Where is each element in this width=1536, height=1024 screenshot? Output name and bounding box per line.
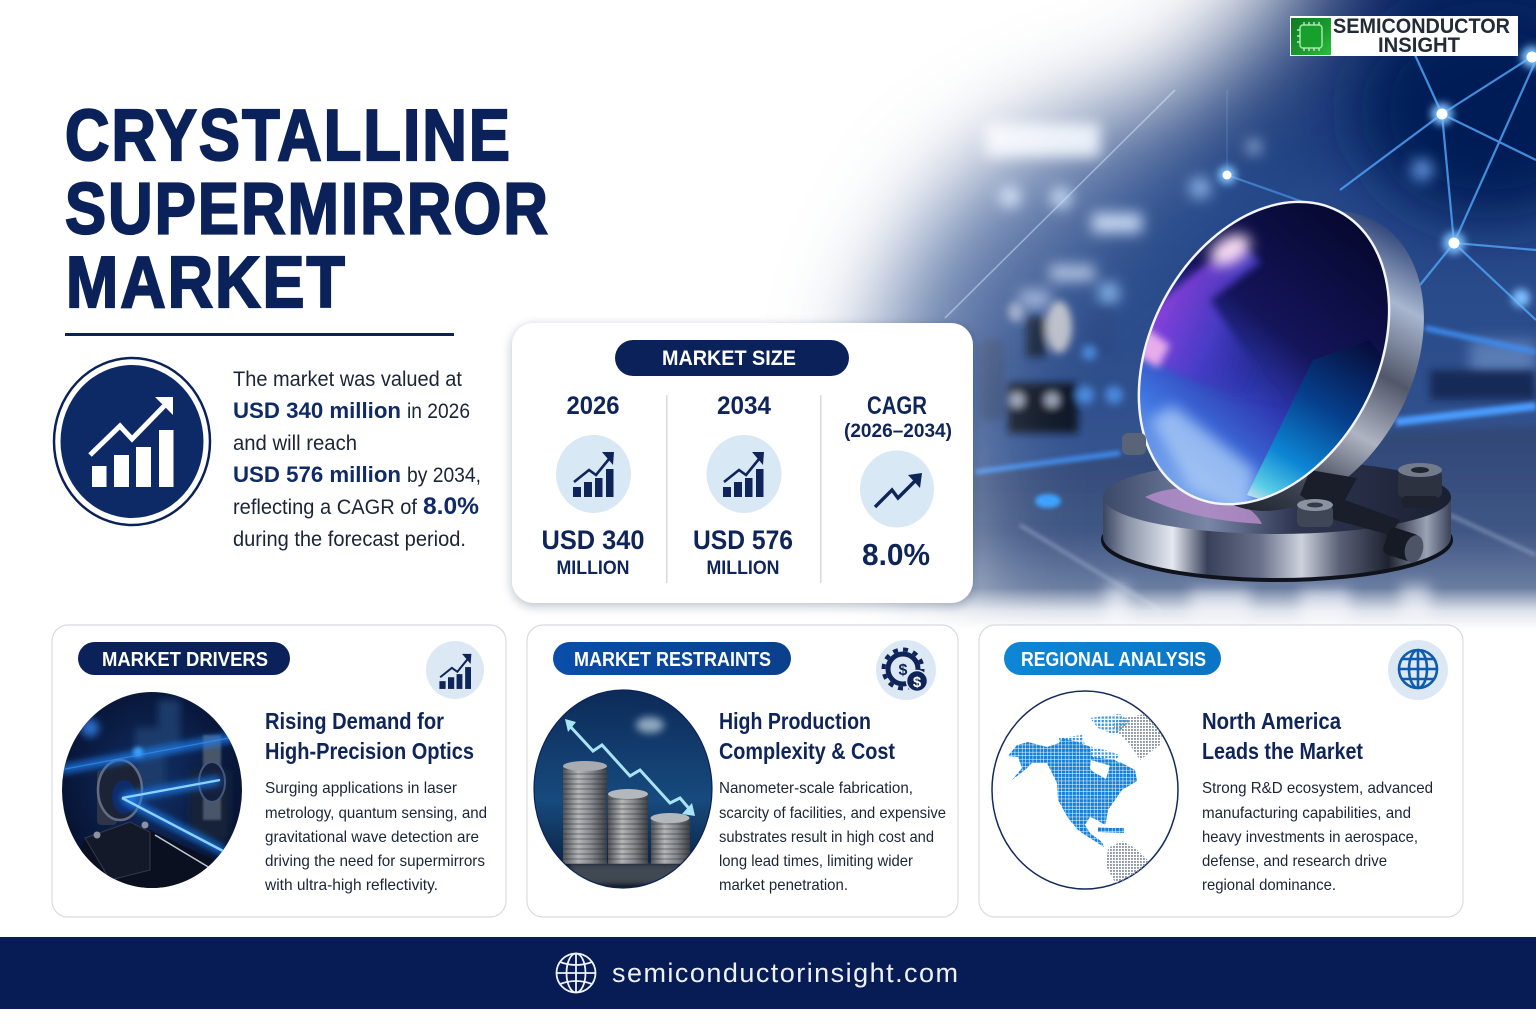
column: 2026: USD 340 <box>542 525 644 555</box>
title <box>65 96 550 323</box>
column: 2026: MILLION <box>556 558 630 579</box>
icon: gear and dollar: $ <box>899 662 908 679</box>
heading: regional: Leads the Market <box>1202 738 1363 764</box>
text: restraints <box>719 780 946 894</box>
text: regional: heavy investments in aerospace, <box>1202 829 1418 846</box>
panel: market size <box>512 323 973 603</box>
market summary text: and will reach <box>233 432 357 455</box>
column: 2026: 2026 <box>566 392 620 420</box>
market summary text: USD 576 million <box>233 462 401 487</box>
text: restraints: scarcity of facilities, and expensive <box>719 805 946 822</box>
text: restraints: substrates result in high cost and <box>719 829 934 846</box>
image: laser optics <box>60 690 245 890</box>
mirror barrel <box>1126 168 1474 554</box>
panel: market drivers <box>52 625 506 917</box>
text: drivers: gravitational wave detection are <box>265 829 479 846</box>
dotted map of North America <box>992 691 1178 889</box>
column: CAGR: CAGR <box>867 392 927 420</box>
icon: gear and dollar: $ <box>913 674 922 691</box>
title: SUPERMIRROR <box>65 170 550 250</box>
text: drivers: with ultra-high reflectivity. <box>264 877 438 894</box>
logo: Semiconductor Insight: SEMICONDUCTOR <box>1333 15 1510 38</box>
column: 2034: USD 576 <box>693 525 793 555</box>
icon: chart <box>426 641 484 699</box>
market summary text: The market was valued at <box>233 368 462 391</box>
image: coin stacks with falling arrow <box>530 688 716 892</box>
text: drivers: Surging applications in laser <box>265 780 458 797</box>
icon: globe <box>1388 640 1448 700</box>
market summary text: in 2026 <box>407 400 470 423</box>
column: CAGR <box>844 392 952 572</box>
regional pill: REGIONAL ANALYSIS <box>1021 649 1206 671</box>
heading: drivers <box>265 708 474 764</box>
heading: restraints: Complexity & Cost <box>719 738 895 764</box>
market summary text: USD 340 million <box>233 398 401 423</box>
column: 2034 <box>693 392 793 579</box>
column: 2034: MILLION <box>706 558 780 579</box>
market size pill: MARKET SIZE <box>662 347 796 370</box>
heading: regional: North America <box>1202 708 1341 734</box>
mirror mount disc <box>1101 460 1453 582</box>
footer bar: semiconductorinsight.com <box>612 958 958 988</box>
market summary text: during the forecast period. <box>233 528 466 551</box>
icon: gear and dollar <box>876 640 936 700</box>
white fade <box>400 0 1340 800</box>
heading: regional <box>1202 708 1363 764</box>
market summary text: by 2034, <box>407 464 481 487</box>
heading: drivers: Rising Demand for <box>265 708 444 734</box>
icon: growth chart badge <box>54 358 210 525</box>
text: regional: regional dominance. <box>1202 877 1336 894</box>
column: 2034: 2034 <box>717 392 771 420</box>
text: regional: defense, and research drive <box>1202 853 1387 870</box>
table surface <box>900 425 1536 660</box>
market summary text: reflecting a CAGR of <box>233 496 417 519</box>
mount screws <box>1122 433 1442 565</box>
market summary text: 8.0% <box>423 493 479 520</box>
logo: Semiconductor Insight <box>1290 15 1518 57</box>
mirror face <box>1138 200 1390 506</box>
text: regional: Strong R&D ecosystem, advanced <box>1202 780 1433 797</box>
heading: drivers: High-Precision Optics <box>265 738 474 764</box>
footer bar <box>0 937 1536 1009</box>
heading: restraints <box>719 708 895 764</box>
market size pill <box>615 340 849 376</box>
logo: Semiconductor Insight: INSIGHT <box>1378 34 1460 57</box>
market summary text <box>233 368 481 551</box>
text: drivers <box>264 780 487 894</box>
drivers pill: MARKET DRIVERS <box>102 649 268 671</box>
column: CAGR: 8.0% <box>862 537 930 572</box>
panel: regional analysis <box>979 625 1463 917</box>
text: restraints: Nanometer-scale fabrication, <box>719 780 913 797</box>
text: drivers: metrology, quantum sensing, and <box>265 805 487 822</box>
column: CAGR: (2026–2034) <box>844 421 952 442</box>
drivers pill <box>78 642 290 675</box>
text: regional: manufacturing capabilities, and <box>1202 805 1411 822</box>
hero image: crystalline supermirror on optical mount <box>812 0 1536 625</box>
restraints pill <box>553 642 791 675</box>
text: regional <box>1202 780 1433 894</box>
icon: footer globe <box>556 954 596 992</box>
title: CRYSTALLINE <box>65 96 512 176</box>
text: restraints: long lead times, limiting wider <box>719 853 914 870</box>
restraints pill: MARKET RESTRAINTS <box>574 649 771 671</box>
text: restraints: market penetration. <box>719 877 848 894</box>
regional pill <box>1004 642 1221 675</box>
heading: restraints: High Production <box>719 708 871 734</box>
panel: market restraints <box>527 625 958 917</box>
column: 2026 <box>542 392 644 579</box>
text: drivers: driving the need for supermirrors <box>265 853 485 870</box>
title: MARKET <box>66 243 347 323</box>
